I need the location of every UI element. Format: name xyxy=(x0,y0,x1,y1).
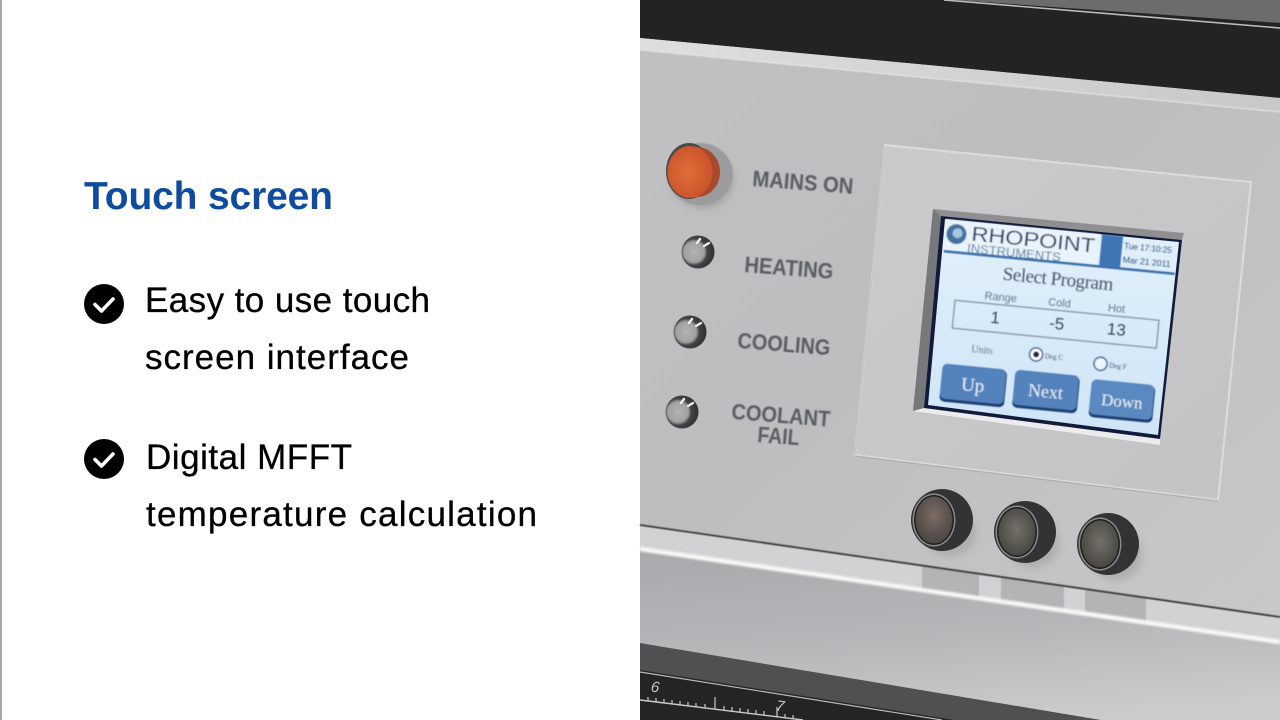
panel top bevel xyxy=(640,38,1280,112)
bullet text: screen interface xyxy=(145,338,409,377)
dark base with ruler: 7 xyxy=(775,698,786,716)
button: Next xyxy=(1012,370,1080,414)
photo: instrument control panel xyxy=(640,0,1280,720)
icon: check mark xyxy=(84,439,124,479)
upper lip of lower band xyxy=(640,525,1280,642)
dark base with ruler: 6 xyxy=(650,679,661,697)
values box: -5 xyxy=(1048,314,1065,334)
indicator: cooling: COOLING xyxy=(737,328,831,360)
faceplate around screen xyxy=(855,145,1251,501)
bullet text: Digital MFFT xyxy=(146,438,352,477)
push button 3 xyxy=(1077,513,1142,580)
push button 1 xyxy=(911,489,976,556)
indicator: coolant fail xyxy=(666,396,832,450)
left panel background xyxy=(0,0,640,720)
button: Up xyxy=(939,363,1007,408)
units selector: Deg F xyxy=(1109,362,1127,371)
button: Down xyxy=(1088,379,1156,423)
units selector: Deg C xyxy=(1045,352,1064,362)
dark base with ruler xyxy=(640,643,1101,720)
bullet text xyxy=(146,438,537,534)
logo header xyxy=(943,219,1178,276)
push button 2 xyxy=(994,501,1059,568)
recess left side xyxy=(913,209,941,411)
screen title: Select Program xyxy=(1002,264,1114,296)
logo header: Mar 21 2011 xyxy=(1122,255,1172,269)
button: Down: Down xyxy=(1100,390,1144,413)
indicator: heating xyxy=(682,236,834,284)
values box: 1 xyxy=(990,308,1001,328)
units selector: Units xyxy=(971,344,993,357)
column labels: Range xyxy=(984,290,1017,305)
screen surface xyxy=(928,219,1179,435)
button: Up: Up xyxy=(960,374,985,397)
values box: 13 xyxy=(1106,319,1127,340)
heading: Touch screen xyxy=(84,175,333,218)
column labels xyxy=(984,290,1126,316)
icon: check mark xyxy=(84,284,124,324)
screen bezel xyxy=(924,216,1182,439)
indicator: coolant fail: COOLANT xyxy=(731,399,832,432)
bullet text xyxy=(145,281,430,377)
logo header: INSTRUMENTS xyxy=(966,241,1061,264)
indicator: mains on xyxy=(666,143,854,208)
lower metal band xyxy=(640,525,1280,720)
units selector xyxy=(970,342,1128,373)
metal front panel xyxy=(640,38,1280,620)
panel groove xyxy=(640,525,1280,617)
logo header: RHOPOINT xyxy=(970,224,1096,258)
dark top housing xyxy=(640,0,1280,110)
indicator: coolant fail: FAIL xyxy=(757,422,800,450)
column labels: Cold xyxy=(1048,296,1071,311)
button reflections xyxy=(922,566,1146,622)
highlight strip xyxy=(640,549,1280,642)
screen content xyxy=(928,219,1178,424)
column labels: Hot xyxy=(1107,302,1126,316)
touch screen display xyxy=(913,209,1184,445)
grey upper strip xyxy=(955,0,1280,23)
values box xyxy=(952,300,1159,348)
button: Next: Next xyxy=(1027,380,1064,403)
left edge sliver xyxy=(0,0,2,720)
bullet text: temperature calculation xyxy=(146,495,537,534)
recess top and bottom xyxy=(933,209,1184,240)
bullet: touch screen interface xyxy=(84,281,430,377)
indicator: cooling xyxy=(674,316,831,360)
indicator: heating: HEATING xyxy=(744,252,834,284)
bullet: MFFT temperature calculation xyxy=(84,438,537,534)
logo header: Tue 17:10:25 xyxy=(1124,242,1173,255)
indicator: mains on: MAINS ON xyxy=(752,166,854,199)
bullet text: Easy to use touch xyxy=(145,281,430,320)
